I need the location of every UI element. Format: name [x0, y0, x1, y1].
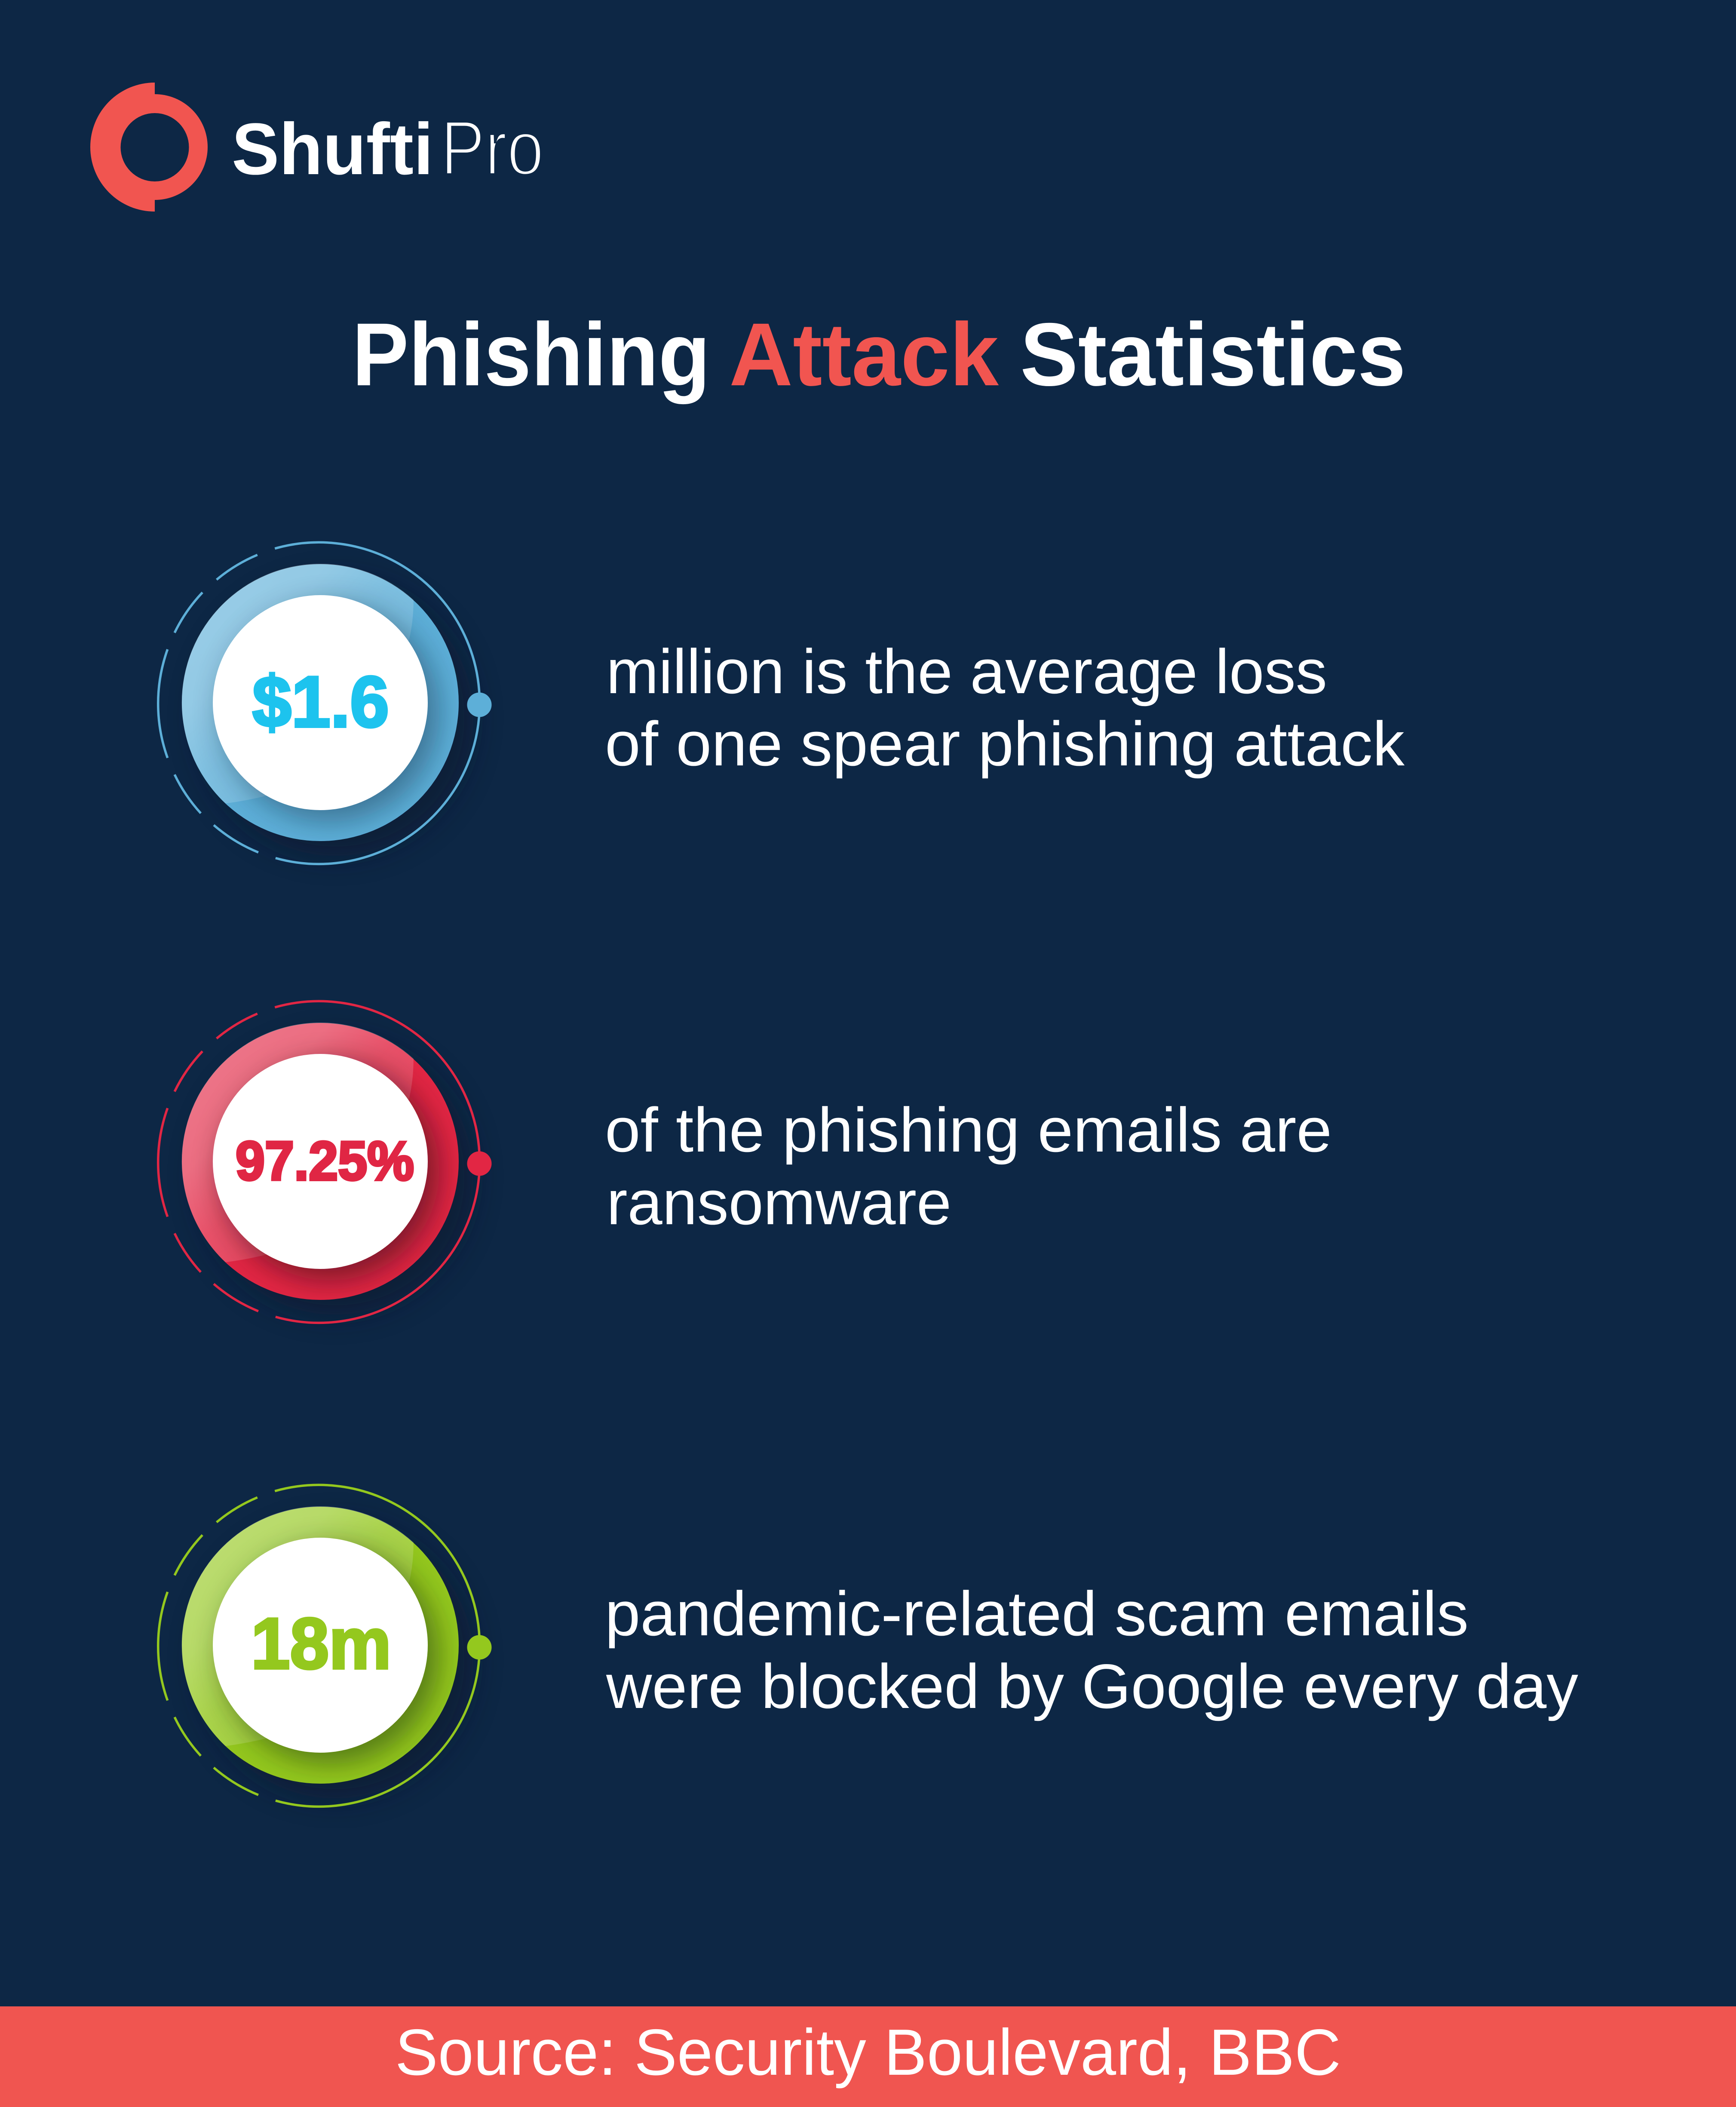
logo wordmark: Pro: Pro: [441, 105, 544, 191]
orbit dot: [467, 692, 492, 717]
stat badge: 18m: [158, 1485, 492, 1806]
title: Phishing: [352, 305, 710, 405]
title: Statistics: [1020, 305, 1406, 405]
footer source bar: [0, 2006, 1736, 2107]
orbit dot: [467, 1152, 492, 1176]
dashed orbit ring: [158, 542, 480, 864]
stat value: 97.25%: [236, 1130, 414, 1192]
stat text: scam emails: [605, 1579, 1578, 1721]
dashed orbit ring: [158, 1001, 480, 1323]
stat value: 18m: [251, 1603, 391, 1684]
stat text: scam emails: were blocked by Google every day: [606, 1651, 1578, 1721]
stat badge: $1.6: [158, 542, 492, 864]
logo wordmark: Shufti: Shufti: [232, 108, 433, 190]
stat text: ransomware: [605, 1095, 1332, 1238]
stat value: $1.6: [252, 661, 389, 742]
stat text: average loss: of one spear phishing attack: [605, 709, 1405, 779]
orbit dot: [467, 1635, 492, 1660]
stat text: average loss: million is the average loss: [606, 636, 1327, 706]
title: Attack: [729, 305, 999, 405]
icon: logo ring: [90, 83, 208, 212]
stat text: average loss: [605, 636, 1405, 779]
stat text: scam emails: pandemic-related scam emails: [605, 1579, 1469, 1649]
stat badge: 97.25%: [158, 1001, 492, 1323]
logo: Shufti Pro: [90, 83, 544, 212]
source text: Source: Security Boulevard, BBC: [395, 2016, 1341, 2089]
stat text: ransomware: ransomware: [607, 1167, 951, 1238]
dashed orbit ring: [158, 1485, 480, 1806]
title: [352, 305, 1406, 405]
stat text: ransomware: of the phishing emails are: [605, 1095, 1332, 1165]
